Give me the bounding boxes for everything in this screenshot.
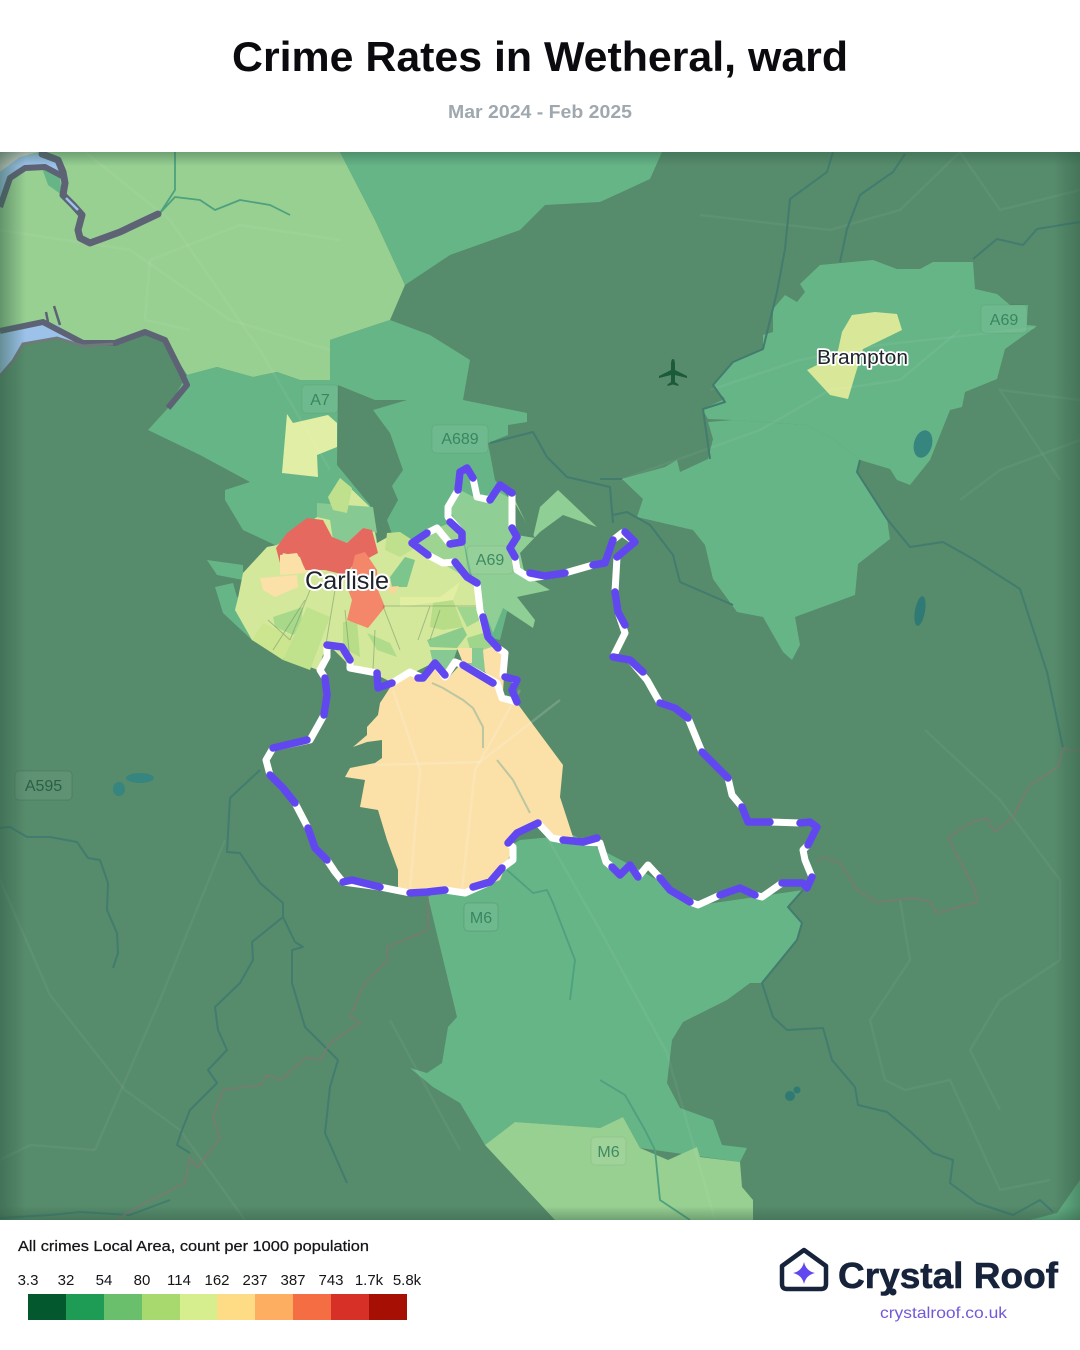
ward: north-east green xyxy=(385,532,414,557)
place label Carlisle: Carlisle xyxy=(305,567,389,595)
ward: south-east green xyxy=(427,627,467,648)
region: far south light green xyxy=(485,1117,753,1220)
road label A69 east: A69 xyxy=(990,312,1018,329)
logo: Crystal Roof xyxy=(782,1250,1059,1322)
legend title: All crimes Local Area, count per 1000 population xyxy=(18,1238,369,1255)
road labels xyxy=(15,305,1027,1165)
patch: peach by motorway xyxy=(483,645,505,692)
map edge vignette xyxy=(0,152,1080,1220)
region: Brampton surroundings xyxy=(702,260,1037,485)
ward: dark wedge east xyxy=(513,500,535,538)
river through peach ward xyxy=(432,683,530,813)
region: north of Carlisle green area xyxy=(148,320,527,640)
roads on peach ward xyxy=(375,690,560,890)
legend values: 54 xyxy=(96,1272,112,1289)
ward: south green xyxy=(283,607,330,670)
choropleth map xyxy=(0,152,1080,1220)
keyhole on the y xyxy=(890,1288,896,1296)
estuary: lower south shore xyxy=(0,338,113,376)
ward: east boundary green xyxy=(467,633,492,659)
subtitle: date range: Mar 2024 - Feb 2025 xyxy=(448,102,632,122)
road label A69 west xyxy=(467,546,513,574)
ward: yellow block north of Carlisle xyxy=(282,414,337,477)
Carlisle urban wards xyxy=(207,414,500,683)
legend values: 743 xyxy=(318,1272,344,1289)
road label A595 xyxy=(15,771,72,800)
icon: house with star xyxy=(782,1250,826,1289)
ward: south-central green xyxy=(343,620,360,657)
ward: south-east green lower xyxy=(430,650,457,670)
ward: mid-green south-west xyxy=(273,607,303,635)
legend values: 5.8k xyxy=(393,1272,422,1289)
estuary: green island xyxy=(42,168,62,195)
ward: small peach xyxy=(388,586,399,595)
estuary: tributary xyxy=(46,306,60,325)
wordmark: Crystal Roof xyxy=(838,1255,1059,1296)
legend values: 80 xyxy=(134,1272,150,1289)
roads xyxy=(0,152,1080,1220)
dark wedge between wards xyxy=(337,385,407,545)
ward outlines xyxy=(268,590,480,670)
legend values xyxy=(18,1272,422,1289)
wards: light-green urban base xyxy=(235,478,500,683)
road label A7 xyxy=(302,385,338,413)
region: south of Brampton xyxy=(622,420,890,660)
road label M6 north xyxy=(464,903,498,931)
legend colour scale xyxy=(28,1294,407,1320)
lakes xyxy=(113,428,935,1101)
estuary: lower water xyxy=(0,322,113,375)
road label M6 south: M6 xyxy=(597,1144,620,1161)
ward: A69 corridor light green xyxy=(448,490,597,633)
road label A69 east xyxy=(981,305,1027,333)
legend values: 32 xyxy=(58,1272,74,1289)
rivers xyxy=(0,152,1080,1218)
road label A7: A7 xyxy=(310,392,330,409)
estuary: upper water xyxy=(0,153,62,207)
legend values: 162 xyxy=(204,1272,230,1289)
estuary: upper shore line xyxy=(0,167,62,207)
Brampton town ward xyxy=(807,312,902,399)
legend values: 114 xyxy=(167,1272,191,1289)
road label M6 north: M6 xyxy=(470,910,492,927)
region: north-west light green area xyxy=(0,152,405,380)
estuary: channel highlight xyxy=(66,198,78,210)
ward: green west outlier xyxy=(215,583,252,640)
legend values: 237 xyxy=(242,1272,268,1289)
legend values: 1.7k xyxy=(355,1272,384,1289)
estuary: upper channel xyxy=(42,154,158,243)
ward: north tip xyxy=(328,478,352,513)
ward: peach north-west xyxy=(280,553,307,575)
road label A689 xyxy=(432,425,488,453)
road label A69 west: A69 xyxy=(476,552,504,569)
ward: peach west xyxy=(260,575,298,597)
ward: orange central xyxy=(347,552,385,628)
legend values: 3.3 xyxy=(18,1272,38,1289)
ward: mid green park xyxy=(390,557,415,587)
ward: south-west green xyxy=(252,623,293,660)
Wetheral ward peach area xyxy=(345,663,573,893)
ward: red north xyxy=(276,518,378,575)
region: south-east corner xyxy=(1030,1180,1080,1220)
rivers in green regions xyxy=(160,152,690,1220)
estuary: top left shore xyxy=(0,152,38,172)
estuary: lower shore line xyxy=(0,322,187,408)
ward: east pale xyxy=(400,582,460,607)
ward boundary: white line xyxy=(266,468,817,905)
ward: north light green xyxy=(317,503,377,543)
title: Crime Rates in Wetheral, ward xyxy=(232,33,848,80)
ward: south-central light xyxy=(367,633,397,657)
county boundary xyxy=(117,748,1080,1220)
road label A689: A689 xyxy=(441,431,479,448)
ward: east mid green xyxy=(457,607,480,627)
ward boundary: purple dashes xyxy=(270,468,817,902)
road label A595: A595 xyxy=(25,778,62,795)
Solway estuary water xyxy=(0,152,187,408)
place label Brampton: Brampton xyxy=(817,346,908,369)
patch: peach north of ward boundary xyxy=(457,648,472,663)
ward: green above peach xyxy=(463,648,485,672)
region: south green area xyxy=(410,835,803,1162)
website: crystalroof.co.uk xyxy=(880,1305,1008,1322)
legend values: 387 xyxy=(280,1272,306,1289)
ward: green west outliers xyxy=(207,560,243,580)
icon: airport plane xyxy=(659,359,687,386)
ward: loop west of A69 xyxy=(412,523,470,580)
road label M6 south xyxy=(591,1137,626,1165)
legend xyxy=(18,1238,422,1320)
ward: east green xyxy=(430,600,463,630)
region: top centre green area xyxy=(340,152,662,285)
